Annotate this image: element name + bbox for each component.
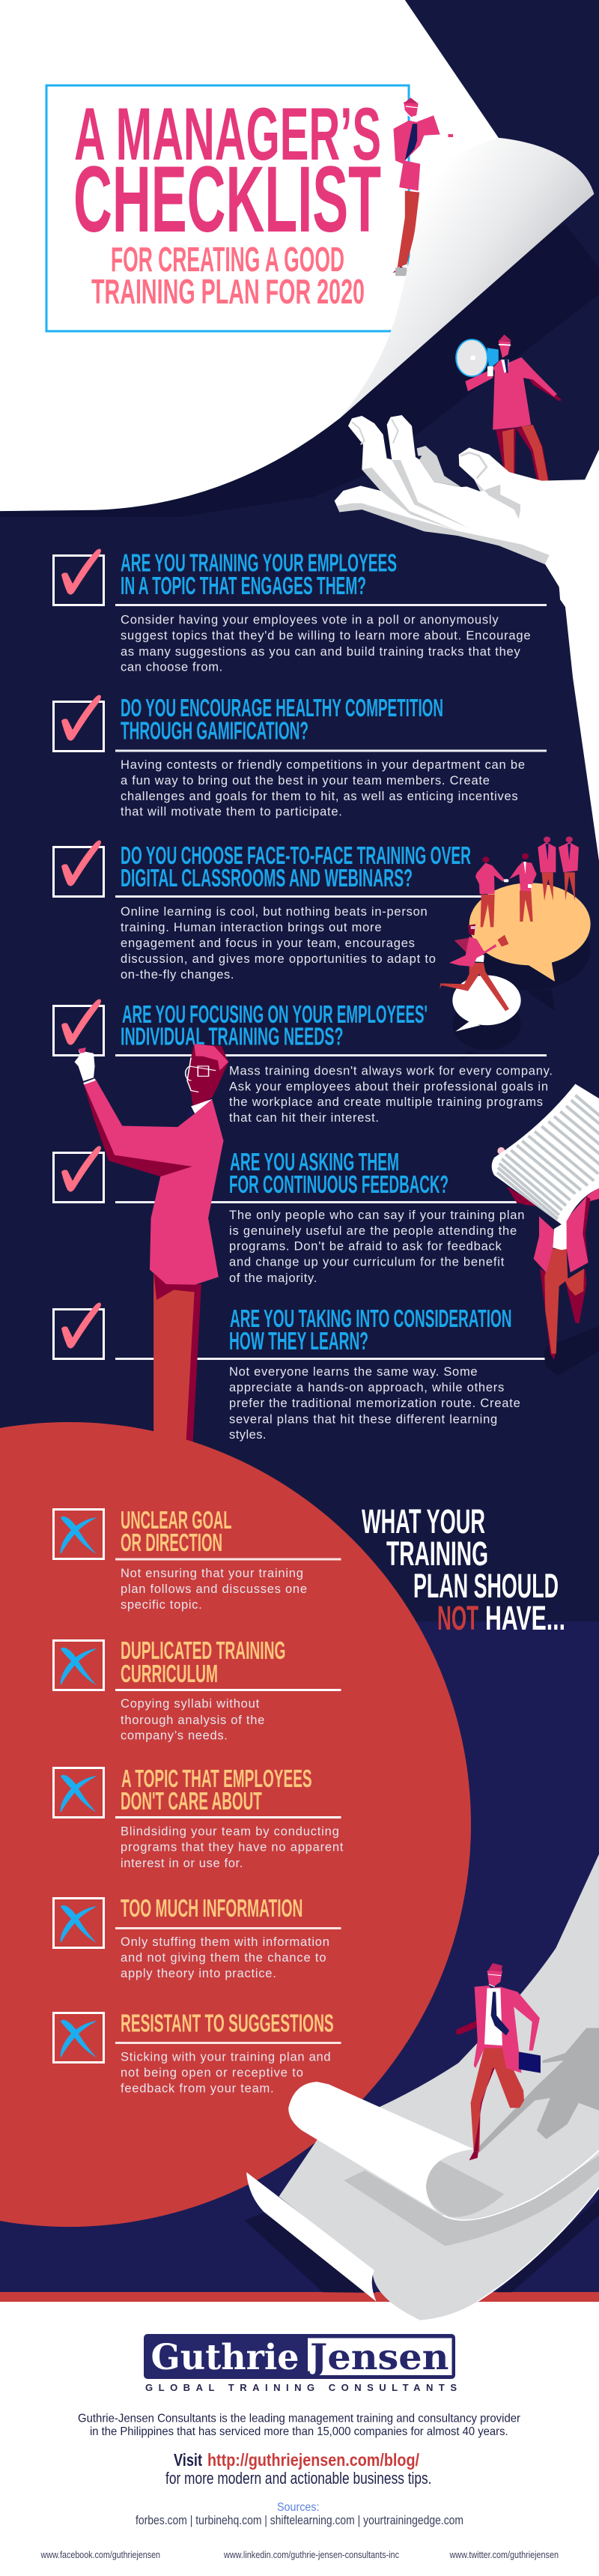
body 5: [229, 1209, 524, 1285]
red circle: [0, 1422, 471, 2227]
body 6: styles.: [229, 1428, 267, 1442]
body 3: discussion, and gives more opportunities to adapt to: [121, 952, 436, 966]
cross body 5: feedback from your team.: [121, 2081, 274, 2095]
checkbox 4: [54, 1000, 103, 1055]
man's shadow: [478, 2028, 599, 2154]
what your training plan should not have heading: TRAINING: [386, 1535, 488, 1573]
checkbox 3: [54, 841, 103, 896]
page curl: folded corner: [340, 138, 594, 418]
cross heading 5: RESISTANT TO SUGGESTIONS: [121, 2010, 334, 2037]
cross body 5: Sticking with your training plan and: [121, 2050, 331, 2063]
body 1: Consider having your employees vote in a poll or anonymously: [121, 613, 499, 626]
negative item 2: [54, 1636, 341, 1743]
item 5: feedback: [54, 1146, 524, 1285]
checkbox 1: [54, 548, 103, 605]
cross box 1: [54, 1509, 103, 1558]
cross body 4: and not giving them the chance to: [121, 1951, 326, 1965]
figures: meeting group and runner: [440, 836, 579, 1011]
heading 1: [121, 548, 397, 599]
body 5: programs. Don't be afraid to ask for feedback: [229, 1239, 502, 1253]
figure: walking man with briefcase: [456, 1963, 541, 2160]
cross body 4: Only stuffing them with information: [121, 1935, 329, 1949]
cross body 2: thorough analysis of the: [121, 1714, 264, 1727]
body 2: challenges and goals for them to hit, as well as enticing incentives: [121, 790, 518, 803]
heading 2: THROUGH GAMIFICATION?: [121, 716, 308, 745]
title: CHECKLIST: [73, 148, 381, 252]
hand holding page: [335, 415, 599, 629]
cross body 3: programs that they have no apparent: [121, 1840, 344, 1854]
title: [73, 92, 381, 311]
scroll sheet: [279, 1854, 599, 2320]
heading 6: HOW THEY LEARN?: [229, 1327, 368, 1355]
scroll white flaps: [246, 2081, 474, 2302]
cross body 3: [121, 1825, 344, 1870]
figure: large man ticking the checklist: [74, 1044, 228, 1456]
body 3: training. Human interaction brings out more: [121, 921, 382, 934]
company description: [78, 2413, 521, 2438]
cross heading 1: UNCLEAR GOAL: [121, 1506, 232, 1534]
heading 4: [121, 1000, 428, 1050]
what your training plan should not have heading: WHAT YOUR: [362, 1502, 485, 1541]
logo: [144, 2334, 457, 2393]
item 6: how they learn: [54, 1302, 547, 1442]
body 6: several plans that hit these different learning: [229, 1413, 497, 1427]
cross body 4: apply theory into practice.: [121, 1967, 276, 1980]
body 4: [229, 1064, 553, 1125]
cross heading 2: CURRICULUM: [121, 1660, 218, 1687]
heading 3: [121, 841, 471, 892]
cross heading 3: DON'T CARE ABOUT: [121, 1787, 262, 1815]
call to action: http://guthriejensen.com/blog/: [207, 2450, 420, 2470]
title: FOR CREATING A GOOD: [111, 240, 344, 279]
body 4: Mass training doesn't always work for every company.: [229, 1064, 553, 1077]
cross box 2: [54, 1641, 103, 1690]
logo: Jensen: [307, 2337, 449, 2378]
title box: [46, 85, 409, 331]
body 4: Ask your employees about their professional goals in: [229, 1080, 548, 1094]
item 2: gamification: [54, 694, 547, 818]
heading 5: [229, 1148, 449, 1198]
speech bubbles with shadows: [452, 883, 591, 1061]
paper scroll with walking man: [245, 1854, 599, 2320]
body 3: [121, 905, 436, 982]
item 1: training topic: [54, 548, 547, 674]
cross heading 2: DUPLICATED TRAINING: [121, 1636, 285, 1664]
cross heading 2: [121, 1636, 285, 1687]
call to action: for more modern and actionable business tips.: [165, 2469, 431, 2488]
cross body 5: not being open or receptive to: [121, 2066, 303, 2080]
checkbox 6: [54, 1302, 103, 1359]
cross body 1: Not ensuring that your training: [121, 1567, 303, 1580]
cross body 4: [121, 1935, 329, 1980]
item 4: individual needs: [54, 1000, 553, 1125]
social links: www.facebook.com/guthriejensen: [40, 2550, 160, 2560]
lower navy background: [0, 1621, 599, 2296]
white footer background: [0, 2302, 599, 2576]
cross heading 1: [121, 1506, 232, 1556]
body 6: Not everyone learns the same way. Some: [229, 1365, 478, 1379]
cross heading 1: OR DIRECTION: [121, 1529, 222, 1556]
heading 1: ARE YOU TRAINING YOUR EMPLOYEES: [121, 548, 397, 577]
body 3: Online learning is cool, but nothing beats in-person: [121, 905, 428, 919]
body 1: as many suggestions as you can and build training tracks that they: [121, 645, 520, 659]
body 6: appreciate a hands-on approach, while others: [229, 1381, 504, 1394]
figure: man with megaphone: [456, 334, 562, 483]
scroll shadow: [245, 2198, 599, 2293]
social links: www.twitter.com/guthriejensen: [449, 2550, 559, 2560]
cross body 1: specific topic.: [121, 1598, 202, 1612]
social links: [40, 2550, 559, 2560]
body 4: the workplace and create multiple training programs: [229, 1095, 543, 1109]
body 4: that can hit their interest.: [229, 1111, 379, 1125]
upper navy background: [0, 0, 599, 1626]
figure: man reading a document: [492, 1084, 599, 1376]
title: A MANAGER’S: [74, 92, 381, 175]
red footer band: [0, 2292, 599, 2302]
logo: Guthrie: [151, 2337, 300, 2378]
cross body 5: [121, 2050, 331, 2095]
cross heading 4: TOO MUCH INFORMATION: [121, 1894, 302, 1922]
what your training plan should not have heading: NOT: [437, 1599, 478, 1637]
negative item 1: [54, 1506, 341, 1612]
item 3: face to face: [54, 841, 481, 982]
call to action: [165, 2450, 431, 2488]
body 6: [229, 1365, 520, 1442]
call to action: Visit: [174, 2450, 202, 2470]
cross body 1: [121, 1567, 307, 1612]
checkbox 2: [54, 695, 103, 751]
heading 1: IN A TOPIC THAT ENGAGES THEM?: [121, 572, 366, 599]
cross body 3: Blindsiding your team by conducting: [121, 1825, 339, 1839]
body 2: Having contests or friendly competitions in your department can be: [121, 758, 525, 772]
figure: handshake and runner: [440, 862, 537, 1011]
company description: Guthrie-Jensen Consultants is the leading management training and consultancy provider: [78, 2413, 521, 2425]
checkbox 5: [54, 1146, 103, 1202]
cross body 2: company’s needs.: [121, 1729, 228, 1743]
figure: two men standing: [482, 836, 579, 901]
body 2: [121, 758, 525, 818]
heading 2: [121, 694, 443, 745]
negative item 3: [54, 1765, 344, 1870]
figure: man peeking from behind page: [392, 97, 453, 276]
company description: in the Philippines that has serviced more than 15,000 companies for almost 40 years.: [90, 2425, 508, 2438]
negative item 5: [54, 2010, 341, 2095]
heading 4: INDIVIDUAL TRAINING NEEDS?: [121, 1022, 343, 1050]
body 2: that will motivate them to participate.: [121, 805, 342, 818]
body 6: prefer the traditional memorization route. Create: [229, 1397, 520, 1410]
body 2: a fun way to bring out the best in your team members. Create: [121, 774, 490, 787]
dark shadow behind page curl: [0, 224, 599, 517]
logo: GLOBAL TRAINING CONSULTANTS: [145, 2382, 457, 2393]
body 1: [121, 613, 530, 674]
body 3: engagement and focus in your team, encourages: [121, 937, 415, 950]
scroll shading: [344, 2156, 599, 2246]
cross box 3: [54, 1768, 103, 1818]
heading 5: ARE YOU ASKING THEM: [230, 1148, 399, 1176]
cross body 2: Copying syllabi without: [121, 1697, 260, 1711]
sources: [136, 2501, 463, 2527]
title: TRAINING PLAN FOR 2020: [91, 272, 365, 311]
body 1: suggest topics that they'd be willing to learn more about. Encourage: [121, 629, 530, 643]
cross box 5: [54, 2013, 103, 2062]
sources: forbes.com | turbinehq.com | shiftelearning.com | yourtrainingedge.com: [136, 2513, 463, 2527]
body 3: on-the-fly changes.: [121, 968, 234, 982]
sleeve at right edge: [545, 450, 599, 861]
cross heading 3: [121, 1765, 312, 1815]
what your training plan should not have heading: [362, 1502, 565, 1637]
heading 6: [229, 1304, 512, 1355]
cross body 2: [121, 1697, 264, 1743]
cross box 4: [54, 1899, 103, 1948]
cross body 3: interest in or use for.: [121, 1857, 243, 1870]
body 5: The only people who can say if your training plan: [229, 1209, 524, 1222]
body 5: is genuinely useful are the people attending the: [229, 1224, 517, 1238]
body 1: can choose from.: [121, 661, 222, 674]
cross body 1: plan follows and discusses one: [121, 1582, 307, 1596]
sources: Sources:: [277, 2501, 319, 2514]
social links: www.linkedin.com/guthrie-jensen-consultants-inc: [223, 2550, 399, 2560]
negative item 4: [54, 1894, 341, 1980]
document: [492, 1084, 599, 1227]
cross heading 3: A TOPIC THAT EMPLOYEES: [121, 1765, 312, 1792]
body 5: of the majority.: [229, 1272, 317, 1285]
body 5: and change up your curriculum for the benefit: [229, 1256, 505, 1269]
page curl: white sheet: [0, 0, 594, 511]
